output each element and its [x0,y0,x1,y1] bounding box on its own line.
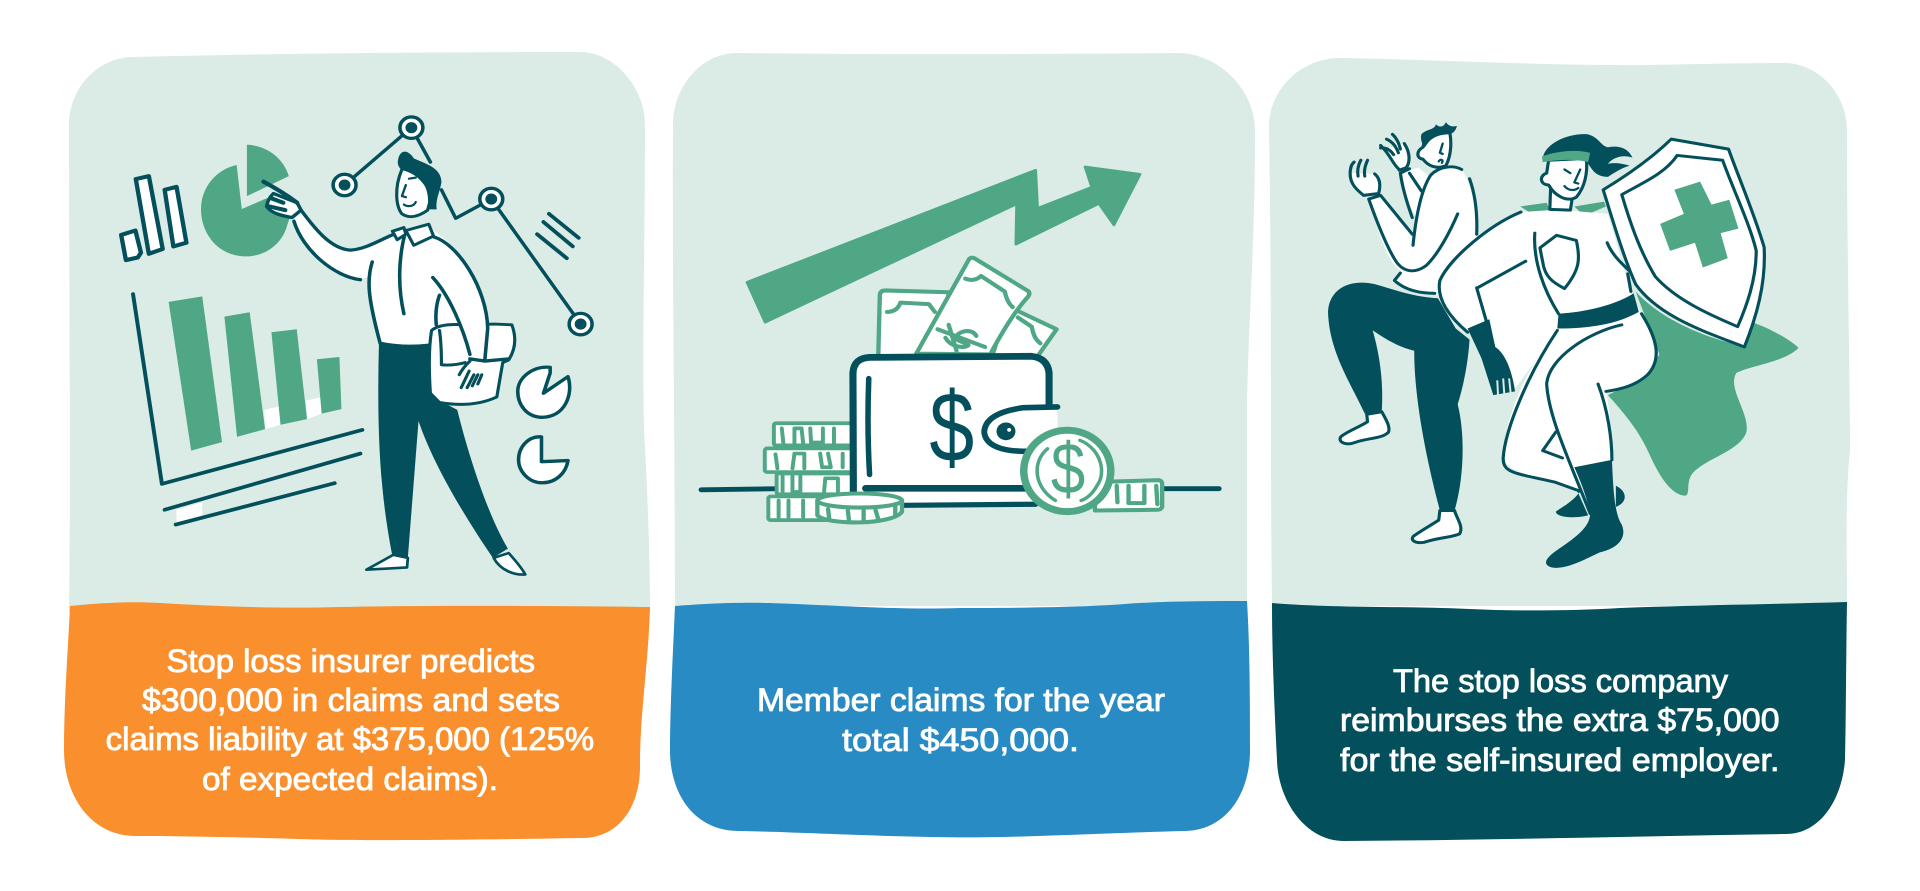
icon: big bar chart [133,294,362,525]
flat coin [817,493,902,522]
hands [1350,173,1380,195]
caption text: reimbursement: The stop loss company [1393,663,1728,699]
glove [1468,319,1515,395]
person: superhero [1439,134,1656,568]
arrow: rising trend [747,167,1140,322]
panel: stop loss reimbursement [1269,58,1850,841]
illustration: analyst with charts [121,117,592,575]
icon: shield with medical cross [1603,139,1764,347]
caption box: orange [64,602,650,840]
caption text: insurer prediction: $300,000 in claims and sets [142,682,560,718]
trousers [1328,283,1470,511]
illustration background: insurer prediction [69,52,650,612]
hair [398,152,441,209]
wallet clasp [984,407,1057,451]
belt [1557,293,1639,329]
hand on folder [459,361,482,388]
coin dollar sign: $ [1051,429,1085,510]
neck [1550,188,1572,210]
caption text: reimbursement: reimburses the extra $75,000 [1340,702,1780,738]
back boot [1555,458,1625,517]
caption text: insurer prediction: claims liability at $375,000 (125% [106,721,594,757]
shoulder wings [1520,202,1606,219]
banknotes [878,258,1057,356]
icon: line chart with nodes [333,117,592,335]
cape [1608,292,1799,496]
icon: small pie charts [518,367,570,483]
illustration background: member claims [673,53,1255,606]
caption text: member claims: Member claims for the year [757,682,1165,718]
headband [1542,151,1590,162]
person: worried man [1328,122,1477,543]
wallet [853,356,1057,505]
icon: three dashes [537,214,579,258]
big coin [1024,429,1111,512]
panel: member claims [670,53,1255,837]
icon: small bar chart [121,176,186,260]
caption box: dark teal [1272,602,1847,841]
pointing hand [267,194,301,218]
caption text: insurer prediction: Stop loss insurer predicts [166,643,535,679]
wallet dollar sign: $ [929,372,974,483]
feet [1340,412,1389,444]
head [1418,129,1451,167]
sleeve over folder [434,240,488,361]
shirt and arm [293,210,487,366]
illustration: wallet and rising arrow [701,167,1219,522]
caption box: blue [670,601,1250,837]
icon: pie chart [201,145,291,256]
person: analyst [264,152,525,575]
hair [1543,134,1632,177]
caption text: insurer prediction: of expected claims). [202,761,498,797]
collar [392,224,434,245]
panel: insurer prediction [64,52,650,840]
suit [1439,210,1656,513]
head [397,166,439,217]
boot [1546,460,1623,568]
shoes [366,553,525,575]
floor line [701,489,1219,490]
illustration background: reimbursement [1269,58,1850,606]
caption text: member claims: total $450,000. [842,722,1079,758]
face [1541,158,1587,199]
trousers [378,343,508,558]
coin stack right [1095,480,1162,511]
illustration: superhero with shield protecting a worried man [1328,122,1799,568]
coin stacks left [765,423,854,520]
chest emblem [1540,235,1579,289]
torso and arm [1369,167,1477,295]
folder [429,324,515,404]
caption text: reimbursement: for the self-insured employer. [1340,742,1780,778]
face details [402,178,416,206]
